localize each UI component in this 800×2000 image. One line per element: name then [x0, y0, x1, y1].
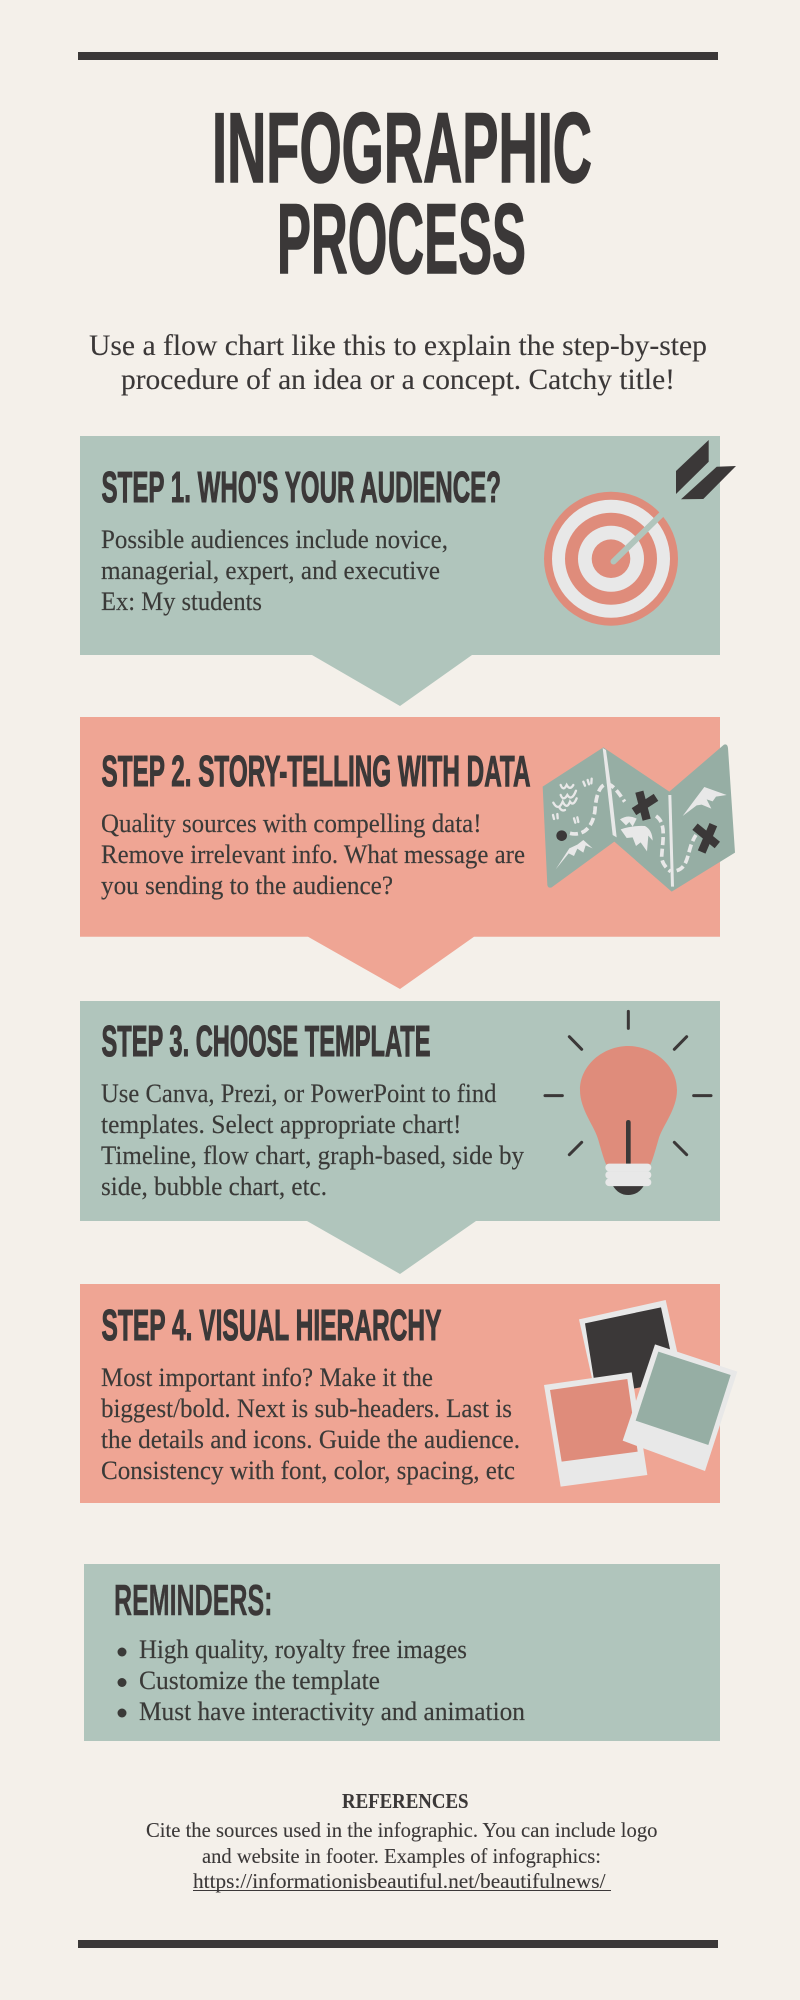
- icon: polaroid photos: [544, 1300, 737, 1487]
- references: [146, 1789, 658, 1893]
- step 2 body text: Remove irrelevant info. What message are: [101, 839, 525, 869]
- reminders heading: REMINDERS:: [114, 1576, 272, 1625]
- icon: target with arrow: [544, 440, 736, 626]
- step 4 background: [80, 1284, 720, 1503]
- step 4 body text: Consistency with font, color, spacing, etc: [101, 1455, 515, 1485]
- references: https://informationisbeautiful.net/beautifulnews/: [193, 1869, 606, 1893]
- panel: step 2: [80, 717, 735, 989]
- subtitle: [89, 330, 707, 396]
- step 4 body text: Most important info? Make it the: [101, 1362, 433, 1392]
- subtitle: Use a flow chart like this to explain the step-by-step: [89, 330, 707, 362]
- bottom bar: [78, 1940, 718, 1948]
- step 1 body text: Ex: My students: [101, 586, 262, 616]
- icon: folded map: [543, 744, 735, 892]
- reminders list: High quality, royalty free images: [139, 1634, 467, 1664]
- step 4 body text: the details and icons. Guide the audience.: [101, 1424, 520, 1454]
- step 3 body text: templates. Select appropriate chart!: [101, 1109, 462, 1139]
- step 2 body text: [101, 808, 525, 900]
- step 3 body text: Use Canva, Prezi, or PowerPoint to find: [101, 1078, 496, 1108]
- top bar: [78, 52, 718, 60]
- references: and website in footer. Examples of infographics:: [202, 1844, 601, 1868]
- subtitle: procedure of an idea or a concept. Catchy title!: [121, 364, 675, 396]
- step 1 background with arrow: [80, 436, 720, 706]
- reminders background: [84, 1564, 720, 1741]
- step 4 body text: [101, 1362, 520, 1485]
- title: [212, 92, 592, 294]
- reminders list: Customize the template: [139, 1665, 380, 1695]
- step 4 body text: biggest/bold. Next is sub-headers. Last is: [101, 1393, 512, 1423]
- step 1 body text: [101, 524, 448, 616]
- icon: light bulb: [545, 1011, 711, 1195]
- reminders list: Must have interactivity and animation: [139, 1696, 525, 1726]
- step 3 background with arrow: [80, 1001, 720, 1274]
- step 2 background with arrow: [80, 717, 720, 989]
- panel: step 3: [80, 1001, 720, 1274]
- reminders list: [118, 1634, 525, 1726]
- step 1 body text: Possible audiences include novice,: [101, 524, 448, 554]
- step 3 body text: Timeline, flow chart, graph-based, side by: [101, 1140, 525, 1170]
- panel: step 1: [80, 436, 736, 706]
- step 2 body text: you sending to the audience?: [101, 870, 393, 900]
- panel: reminders: [84, 1564, 720, 1741]
- step 3 body text: side, bubble chart, etc.: [101, 1171, 327, 1201]
- title: PROCESS: [277, 183, 526, 294]
- step 4 heading: STEP 4. VISUAL HIERARCHY: [102, 1301, 442, 1350]
- step 1 body text: managerial, expert, and executive: [101, 555, 440, 585]
- step 2 body text: Quality sources with compelling data!: [101, 808, 482, 838]
- references: Cite the sources used in the infographic. You can include logo: [146, 1818, 658, 1842]
- step 3 heading: STEP 3. CHOOSE TEMPLATE: [102, 1017, 430, 1066]
- references: REFERENCES: [342, 1789, 468, 1813]
- panel: step 4: [80, 1284, 737, 1503]
- step 3 body text: [101, 1078, 525, 1201]
